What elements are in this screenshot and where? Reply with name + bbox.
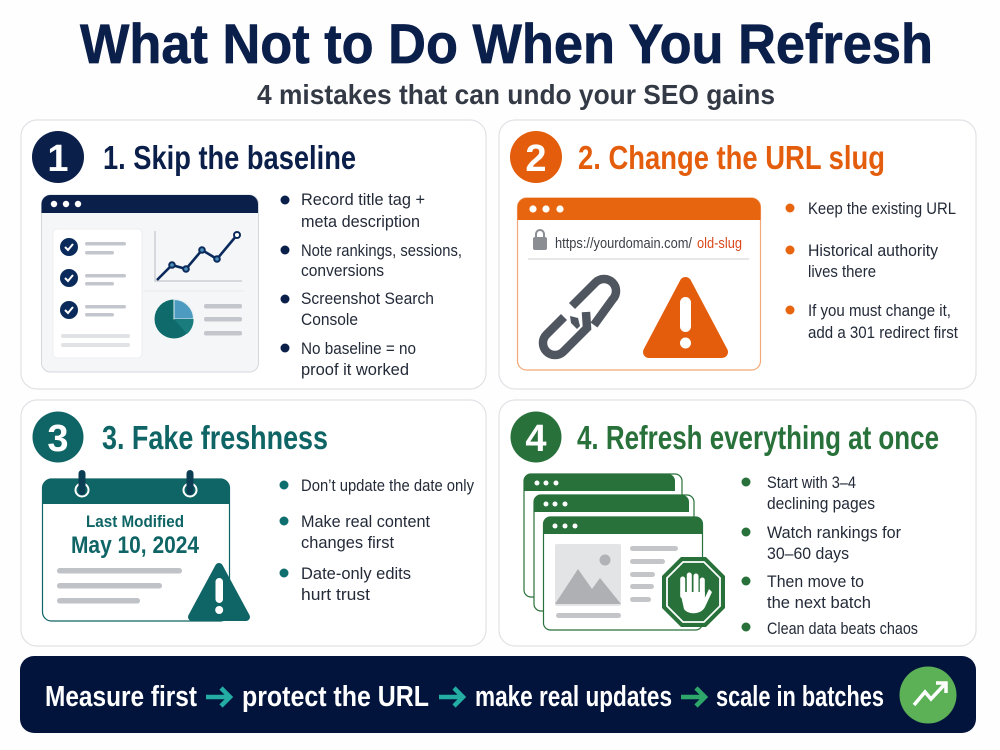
bullets 3: Date-only edits	[301, 565, 411, 583]
banner text: protect the URL	[242, 681, 429, 713]
bullets 3: Don’t update the date only	[301, 477, 475, 495]
panel: 1 skip the baseline	[21, 120, 486, 389]
bullets 4: Watch rankings for	[767, 524, 901, 542]
bullets 1: Note rankings, sessions,	[301, 242, 462, 260]
bullets 2: Historical authority	[808, 242, 939, 260]
number badge 1	[32, 131, 84, 183]
bullets 1: No baseline = no	[301, 340, 416, 358]
banner text	[45, 681, 884, 713]
icon: calendar with warning: Last Modified	[86, 512, 184, 531]
number badge 2	[510, 131, 562, 183]
bullets 1: proof it worked	[301, 361, 409, 379]
banner text: scale in batches	[716, 681, 884, 713]
icon: calendar with warning	[42, 470, 246, 621]
bullets 4: the next batch	[767, 594, 871, 612]
number badge 4	[510, 412, 562, 462]
icon: browser with broken link	[518, 198, 760, 370]
bullets 3: changes first	[301, 534, 394, 552]
banner: takeaway	[20, 656, 976, 733]
banner text: Measure first	[45, 681, 197, 713]
icon: dashboard browser	[42, 195, 258, 372]
number badge 3	[32, 412, 84, 462]
number badge 1: 1	[47, 138, 69, 180]
icon: stacked browsers with stop sign	[524, 474, 725, 630]
panel: 4 refresh everything at once	[499, 400, 976, 646]
bullets 1	[280, 191, 462, 379]
number badge 2: 2	[525, 138, 547, 180]
number badge 3: 3	[47, 418, 69, 460]
banner text: make real updates	[475, 681, 672, 713]
bullets 1: meta description	[301, 213, 420, 231]
bullets 1: Record title tag +	[301, 191, 425, 209]
bullets 4	[742, 474, 918, 638]
bullets 4: Start with 3–4	[767, 474, 856, 492]
icon: browser with broken link: old-slug	[697, 235, 742, 252]
bullets 1: Screenshot Search	[301, 290, 434, 308]
heading 3: 3. Fake freshness	[102, 419, 328, 456]
bullets 1: Console	[301, 311, 358, 329]
bullets 2: lives there	[808, 263, 876, 281]
bullets 3: Make real content	[301, 513, 430, 531]
number badge 4: 4	[525, 418, 547, 460]
panel: 2 change the URL slug	[499, 120, 976, 389]
subtitle: 4 mistakes that can undo your SEO gains	[257, 79, 775, 110]
arrows	[206, 688, 705, 706]
bullets 4: 30–60 days	[767, 545, 849, 563]
heading 1: 1. Skip the baseline	[103, 139, 356, 176]
bullets 2: add a 301 redirect first	[808, 324, 958, 342]
title: What Not to Do When You Refresh	[80, 12, 933, 75]
bullets 3: hurt trust	[301, 586, 370, 604]
icon: calendar with warning: May 10, 2024	[71, 532, 200, 559]
bullets 2: Keep the existing URL	[808, 200, 956, 218]
heading 2: 2. Change the URL slug	[578, 139, 885, 176]
bullets 4: Then move to	[767, 573, 864, 591]
icon: growth trend	[900, 666, 956, 724]
icon: browser with broken link: https://yourdomain.com/	[555, 235, 693, 252]
bullets 2: If you must change it,	[808, 302, 951, 320]
bullets 4: Clean data beats chaos	[767, 620, 918, 638]
bullets 4: declining pages	[767, 495, 875, 513]
bullets 2	[786, 200, 958, 342]
bullets 3	[280, 477, 475, 604]
panel: 3 fake freshness	[21, 400, 486, 646]
bullets 1: conversions	[301, 262, 384, 280]
